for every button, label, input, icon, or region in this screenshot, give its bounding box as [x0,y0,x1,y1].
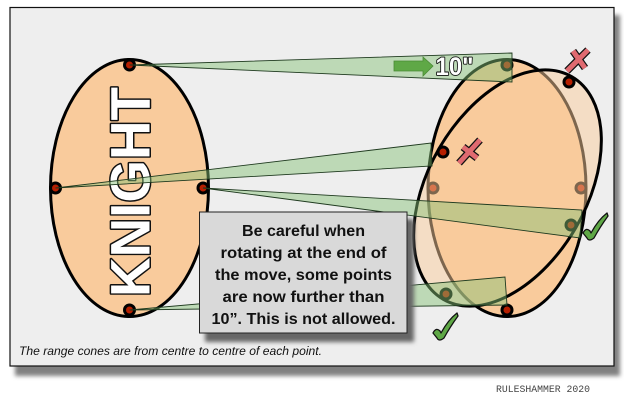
range cones [56,53,582,310]
callout: warning box: Be careful when [242,223,365,240]
icon: cross top right [567,50,588,71]
callout: warning box: are now further than [222,289,384,306]
right ellipse: rotated position [375,37,624,339]
left ellipse: knight base [50,60,208,316]
original position points [428,60,586,315]
icon: check right [583,213,608,240]
right ellipse: original position [428,60,586,316]
credit: RULESHAMMER 2020 [496,384,590,395]
caption: The range cones are from centre to centre of each point. [19,346,322,358]
range label: 10" [436,53,474,81]
callout: warning box [200,212,414,342]
callout: warning box: rotating at the end of [220,245,387,262]
callout: warning box: the move, some points [215,267,392,284]
arrow: 10 inch range [394,57,433,76]
rotated ellipse outline [375,37,624,339]
knight label: KNIGHT [98,87,162,297]
callout: warning box: 10”. This is not allowed. [212,311,396,328]
icon: check bottom [433,313,458,340]
icon: cross left [459,140,480,163]
left base contact points [50,60,208,315]
rotated position points [438,77,576,299]
